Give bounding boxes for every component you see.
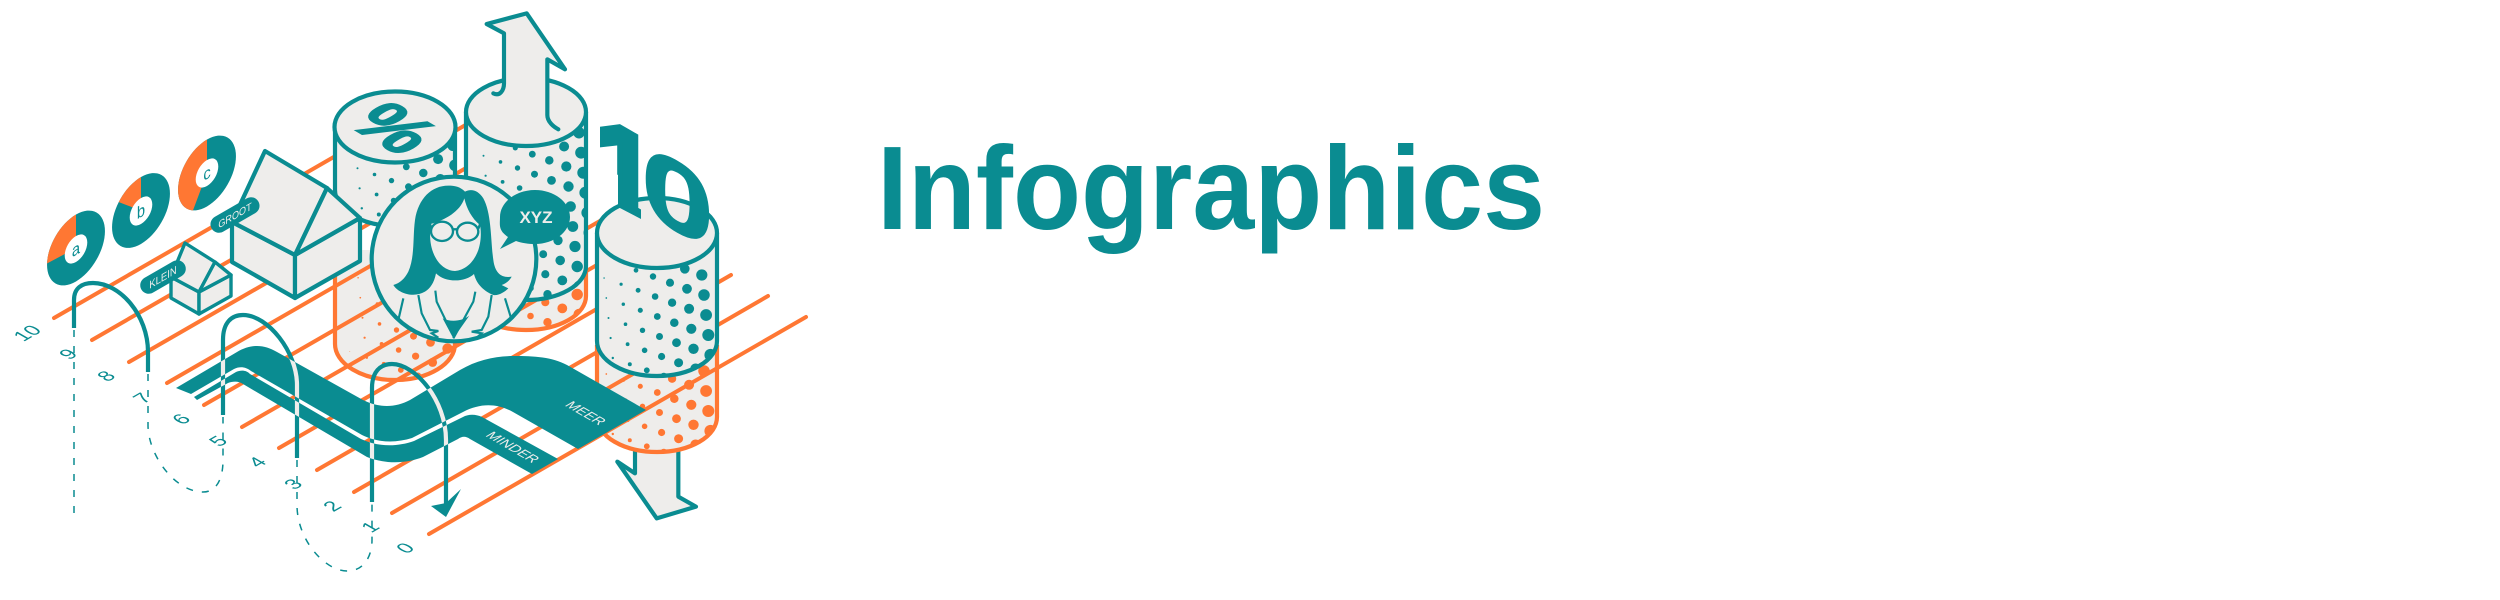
arrow pointing up	[487, 13, 565, 129]
axis numbers: 10	[9, 322, 47, 345]
cylinder with number ten	[594, 124, 720, 378]
pill label: KLEIN	[137, 257, 189, 297]
axis numbers: 6	[168, 411, 196, 428]
axis numbers: 7	[129, 390, 157, 407]
axis numbers: 0	[392, 540, 420, 557]
loop segments over band	[220, 358, 448, 460]
axis numbers: 4	[244, 454, 272, 471]
axis numbers: 1	[357, 519, 385, 536]
percent sign: %	[332, 92, 456, 165]
orange isometric grid lines	[54, 101, 806, 534]
blouse neckline	[443, 316, 469, 338]
speech bubble	[500, 190, 570, 249]
small house	[171, 243, 231, 314]
arrow pointing down	[617, 447, 696, 518]
donut chart c	[178, 136, 236, 210]
axis numbers: 2	[319, 498, 347, 515]
band: minder	[194, 371, 558, 474]
pill label: KLEIN: KLEIN	[149, 264, 177, 292]
label: MEER: MEER	[562, 399, 610, 427]
large house	[232, 151, 360, 298]
donut chart a: a	[72, 237, 81, 261]
big number 10: 0	[641, 121, 714, 274]
hair	[393, 186, 512, 295]
cylinder with percent sign	[332, 89, 458, 226]
band: meer	[176, 346, 646, 449]
axis loops over band	[74, 283, 446, 505]
infographic banner	[15, 11, 1540, 572]
pill label: GROOT: GROOT	[218, 201, 252, 232]
big number 10	[600, 124, 710, 239]
portrait in circle	[372, 177, 536, 341]
cylinder with arrow up	[466, 13, 601, 305]
axis numbers: 5	[205, 433, 233, 450]
donut chart b	[112, 173, 170, 248]
axis numbers	[9, 322, 420, 557]
label: MINDER: MINDER	[482, 429, 544, 465]
face	[430, 198, 481, 271]
title: Infographics	[877, 122, 1545, 255]
donut chart a	[47, 210, 105, 286]
axis numbers: 8	[93, 368, 121, 385]
donut chart c: c	[203, 162, 211, 185]
axis numbers: 9	[55, 346, 83, 363]
cylinder bases in orange	[332, 250, 720, 454]
donut chart b: b	[137, 200, 145, 223]
jacket lines	[398, 291, 512, 338]
dashed axis lines	[74, 330, 372, 571]
axis numbers: 3	[280, 476, 308, 493]
speech bubble: XYZ	[519, 208, 553, 227]
big number 10: 1	[593, 86, 657, 262]
pill label: GROOT	[207, 194, 263, 236]
glasses	[430, 222, 480, 241]
arrowhead	[431, 489, 461, 517]
